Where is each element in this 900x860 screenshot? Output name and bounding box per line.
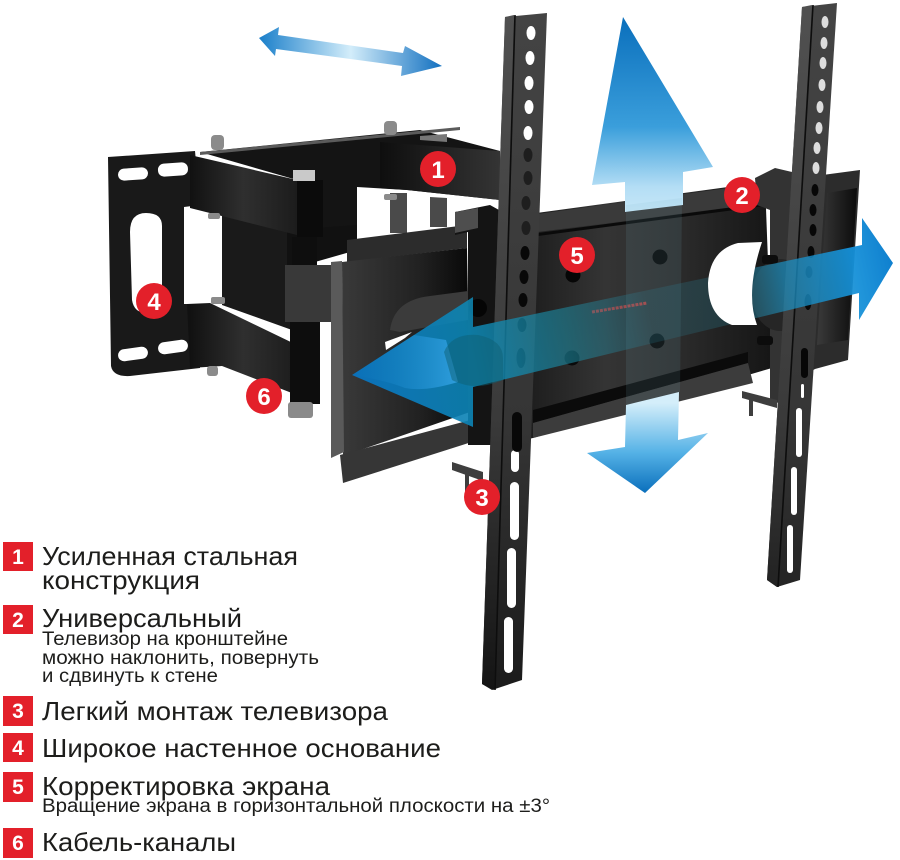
marker 2: 2: [735, 183, 749, 210]
marker 6: 6: [257, 384, 271, 411]
feature 5: 5: [12, 776, 24, 799]
feature 2: [3, 603, 319, 687]
right tilt hinge: [752, 168, 808, 405]
arrow: vertical lower: [587, 392, 708, 493]
wall plate: [108, 151, 200, 376]
marker 4: [136, 283, 172, 319]
arrow highlight: bright lobe in left head: [352, 335, 458, 389]
lower front arm: [187, 303, 297, 395]
feature 2: Универсальный: [42, 603, 242, 633]
pivot column: [285, 170, 331, 418]
feature 4: Широкое настенное основание: [42, 733, 441, 763]
feature legend: [3, 541, 550, 858]
feature 5: [3, 771, 550, 817]
arrow highlight: mount knob under arrow: [444, 335, 503, 386]
marker 1: [420, 151, 456, 187]
arrow: vertical upper: [592, 17, 713, 212]
main TV plate: [500, 170, 860, 445]
arrow: vertical shaft behind translucent band: [626, 198, 682, 405]
feature 5: Вращение экрана в горизонтальной плоскости на ±3°: [42, 796, 550, 817]
plate cut-out seen through arrow: [708, 242, 762, 325]
mounting nuts: [207, 121, 397, 376]
feature 1: Усиленная стальная: [42, 541, 298, 571]
feature 1: конструкция: [42, 565, 200, 595]
feature 3: Легкий монтаж телевизора: [42, 696, 389, 726]
marker 1: 1: [431, 157, 445, 184]
callout markers: [136, 151, 760, 515]
clamp screws: [452, 391, 777, 492]
left vertical rail: [482, 13, 547, 690]
marker 3: 3: [475, 485, 489, 512]
feature 2: 2: [12, 609, 24, 632]
feature 6: Кабель-каналы: [42, 827, 236, 857]
feature 2: Телевизор на кронштейне: [42, 629, 288, 650]
feature 1: [3, 541, 298, 595]
right vertical rail: [767, 3, 837, 587]
rear arm and top flange: [200, 127, 500, 330]
upper front arm: [190, 155, 297, 235]
feature 2: и сдвинуть к стене: [42, 666, 218, 687]
arrow: sideways swing at top: [259, 27, 442, 76]
marker 5: [559, 237, 595, 273]
marker 6: [246, 378, 282, 414]
marker 2: [724, 177, 760, 213]
marker 4: 4: [147, 289, 161, 316]
feature 1: 1: [12, 546, 24, 569]
bracket illustration: [108, 3, 860, 690]
marker 5: 5: [570, 243, 584, 270]
feature 5: Корректировка экрана: [42, 771, 331, 801]
feature 6: 6: [12, 832, 24, 855]
hinge plate: [331, 205, 508, 483]
feature 3: 3: [12, 700, 24, 723]
marker 3: [464, 479, 500, 515]
arrow: horizontal double arrow: [352, 218, 893, 427]
feature 2: можно наклонить, повернуть: [42, 648, 319, 669]
feature 4: 4: [12, 737, 24, 760]
